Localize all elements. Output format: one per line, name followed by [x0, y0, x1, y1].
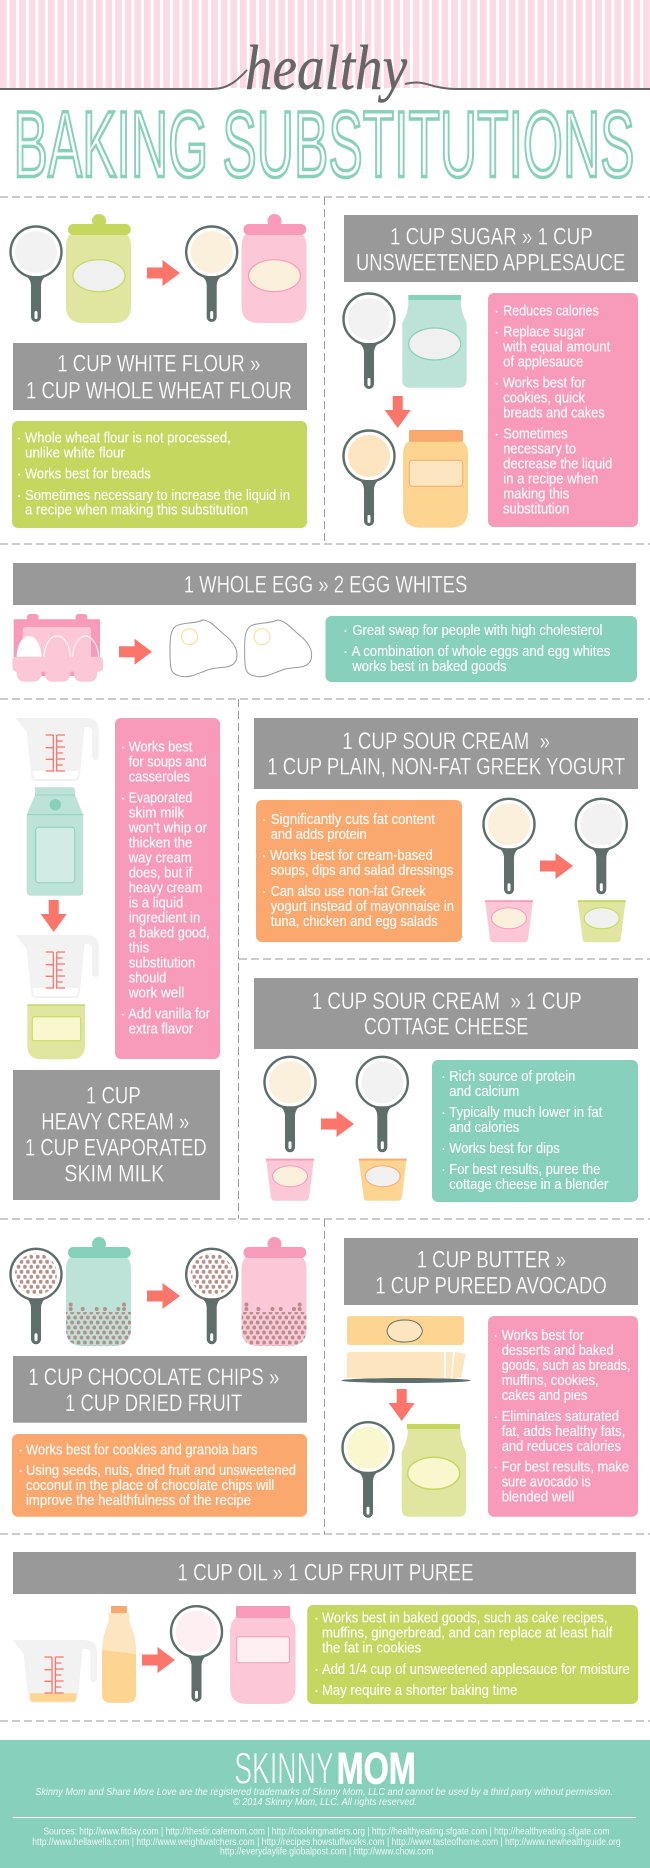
heading: [344, 215, 638, 282]
header: pink stripes: [0, 0, 650, 88]
text box: sugar notes: cookies, quick: [503, 391, 586, 407]
text box: cream notes: for soups and: [129, 755, 207, 771]
text box: egg notes: works best in baked goods: [352, 659, 507, 675]
icon: pink tub: [266, 1159, 314, 1201]
text box: avocado notes: [488, 1316, 638, 1517]
text box: flour notes: ·: [17, 431, 21, 447]
heading: 1 CUP WHITE FLOUR »: [57, 351, 260, 378]
icon: small green jar: [27, 1004, 85, 1059]
text box: cottage cheese notes: Typically much lower in fat: [449, 1105, 602, 1121]
panel: sugar to applesauce: [344, 215, 638, 528]
text box: cream notes: extra flavor: [129, 1021, 193, 1037]
text box: chocolate chip notes: ·: [18, 1442, 23, 1458]
text box: flour notes: [12, 421, 307, 528]
text box: cream notes: work well: [128, 986, 184, 1002]
heading: [13, 563, 636, 605]
text box: avocado notes: cakes and pies: [502, 1388, 587, 1404]
text box: oil notes: muffins, gingerbread, and can replace at least half: [322, 1626, 613, 1642]
text box: cream notes: substitution: [129, 956, 195, 972]
text box: yogurt notes: ·: [262, 884, 266, 900]
text box: yogurt notes: ·: [262, 812, 266, 828]
trademark notice: Skinny Mom and Share More Love are the registered trademarks of Skinny Mom, LLC and cannot be used by a third party without permission.: [35, 1787, 613, 1798]
heading: [13, 1356, 307, 1423]
icon: spoon of sour cream: [264, 1057, 316, 1152]
text box: cottage cheese notes: [432, 1060, 638, 1202]
text box: cream notes: thicken the: [129, 836, 192, 852]
text box: cream notes: ·: [121, 1006, 125, 1022]
arrow: [385, 396, 411, 428]
text box: yogurt notes: Significantly cuts fat content: [271, 812, 435, 828]
text box: flour notes: Whole wheat flour is not processed,: [25, 431, 231, 447]
text box: oil notes: the fat in cookies: [322, 1641, 421, 1657]
text box: cream notes: Works best: [129, 740, 192, 756]
text box: cream notes: casseroles: [129, 770, 190, 786]
arrow: [389, 1389, 415, 1421]
text box: oil notes: [307, 1605, 638, 1704]
text box: chocolate chip notes: Works best for cookies and granola bars: [26, 1442, 257, 1458]
icon: second egg white: [245, 620, 312, 677]
text box: sugar notes: ·: [494, 427, 499, 443]
panel: white flour to whole wheat flour: [10, 214, 307, 528]
arrow: [540, 853, 573, 879]
icon: teal jar with chips: [66, 1237, 131, 1346]
heading: 1 CUP BUTTER »: [417, 1247, 566, 1274]
heading: 1 CUP SOUR CREAM »: [342, 728, 550, 755]
text box: yogurt notes: yogurt instead of mayonnaise in: [271, 899, 454, 915]
heading: 1 WHOLE EGG » 2 EGG WHITES: [184, 572, 467, 599]
arrow: [142, 1647, 175, 1673]
text box: yogurt notes: [256, 800, 462, 942]
text box: sugar notes: Reduces calories: [503, 304, 599, 320]
icon: spoon of white flour: [10, 226, 62, 322]
text box: oil notes: Works best in baked goods, such as cake recipes,: [322, 1611, 607, 1627]
panel: heavy cream to evaporated skim milk: [13, 718, 220, 1200]
text box: chocolate chip notes: Using seeds, nuts, dried fruit and unsweetened: [26, 1463, 296, 1479]
heading: [13, 1070, 220, 1200]
icon: measuring cup with evaporated milk: [16, 935, 99, 998]
text box: avocado notes: blended well: [502, 1490, 574, 1506]
text box: sugar notes: Sometimes: [503, 427, 568, 443]
heading: [13, 343, 307, 410]
text box: sugar notes: decrease the liquid: [503, 457, 612, 473]
text box: avocado notes: Works best for: [502, 1328, 584, 1344]
text box: sugar notes: of applesauce: [503, 355, 583, 371]
footer background: [0, 1740, 650, 1868]
panel: chocolate chips to dried fruit: [10, 1237, 307, 1517]
text box: egg notes: ·: [343, 644, 348, 660]
icon: spoon of fruit puree: [171, 1606, 222, 1702]
heading: 1 CUP WHOLE WHEAT FLOUR: [26, 377, 292, 404]
text box: flour notes: ·: [17, 466, 21, 482]
icon: spoon of avocado: [342, 1422, 394, 1518]
icon: egg carton: [12, 614, 103, 682]
heading: [13, 1552, 636, 1594]
text box: avocado notes: ·: [493, 1409, 498, 1425]
text box: sugar notes: substitution: [503, 502, 569, 518]
panel: oil to fruit puree: [12, 1552, 638, 1704]
heading: [254, 718, 638, 789]
text box: cottage cheese notes: cottage cheese in a blender: [449, 1177, 608, 1193]
icon: measuring cup with oil: [12, 1640, 97, 1703]
heading: 1 CUP CHOCOLATE CHIPS »: [28, 1364, 279, 1391]
text box: oil notes: ·: [314, 1662, 319, 1678]
icon: green bottle: [402, 1424, 466, 1517]
text box: sugar notes: ·: [494, 304, 499, 320]
text box: cottage cheese notes: For best results, puree the: [449, 1162, 600, 1178]
text box: flour notes: Sometimes necessary to increase the liquid in: [25, 488, 290, 504]
icon: spoon of wheat flour: [186, 226, 237, 322]
text box: yogurt notes: Works best for cream-based: [270, 848, 433, 864]
icon: spoon of chocolate chips: [10, 1249, 62, 1344]
text box: sugar notes: making this: [503, 487, 569, 503]
icon: spoon of applesauce: [344, 430, 394, 526]
text box: avocado notes: Eliminates saturated: [502, 1409, 619, 1425]
text box: egg notes: Great swap for people with high cholesterol: [352, 623, 602, 639]
text box: avocado notes: desserts and baked: [502, 1343, 614, 1359]
text box: oil notes: May require a shorter baking time: [322, 1683, 517, 1699]
text box: yogurt notes: Can also use non-fat Greek: [271, 884, 426, 900]
heading: [344, 1238, 638, 1305]
text box: chocolate chip notes: [12, 1434, 307, 1517]
arrow: [321, 1111, 354, 1137]
text box: avocado notes: and reduces calories: [502, 1439, 621, 1455]
text box: sugar notes: with equal amount: [502, 340, 610, 356]
icon: milk carton: [27, 787, 83, 896]
heading: 1 CUP SUGAR » 1 CUP: [390, 223, 593, 250]
text box: cream notes: does, but if: [129, 866, 193, 882]
arrow: [41, 900, 67, 932]
heading: 1 CUP DRIED FRUIT: [65, 1390, 243, 1417]
text box: flour notes: unlike white flour: [25, 446, 125, 462]
heading: 1 CUP OIL » 1 CUP FRUIT PUREE: [177, 1560, 474, 1587]
heading: 1 CUP: [86, 1082, 141, 1109]
icon: oil bottle: [102, 1606, 136, 1703]
text box: cream notes: Evaporated: [129, 791, 192, 807]
text box: yogurt notes: ·: [262, 848, 266, 864]
text box: cream notes: ·: [121, 740, 125, 756]
text box: yogurt notes: tuna, chicken and egg salads: [271, 914, 438, 930]
text box: avocado notes: goods, such as breads,: [502, 1358, 630, 1374]
heading: HEAVY CREAM »: [41, 1108, 189, 1135]
text box: flour notes: ·: [17, 488, 21, 504]
text box: cottage cheese notes: ·: [441, 1105, 446, 1121]
text box: cream notes: ingredient in: [129, 911, 200, 927]
arrow: [119, 639, 152, 665]
icon: first egg white: [170, 620, 237, 677]
text box: egg notes: [326, 616, 637, 682]
footer: [0, 1740, 650, 1868]
text box: sugar notes: Works best for: [503, 376, 586, 392]
text box: cream notes: should: [129, 971, 166, 987]
text box: avocado notes: sure avocado is: [502, 1475, 591, 1491]
text box: yogurt notes: and adds protein: [271, 827, 367, 843]
text box: cottage cheese notes: and calories: [449, 1120, 519, 1136]
text box: oil notes: ·: [314, 1683, 319, 1699]
text box: cottage cheese notes: Works best for dips: [449, 1141, 560, 1157]
text box: sugar notes: breads and cakes: [503, 406, 605, 422]
logo: skinny mom: SKINNY: [234, 1744, 334, 1793]
panel: sour cream to greek yogurt: [254, 718, 638, 942]
text box: egg notes: A combination of whole eggs and egg whites: [352, 644, 610, 660]
text box: egg notes: ·: [343, 623, 348, 639]
header rule with swash: [0, 70, 650, 89]
title: healthy: healthy: [245, 32, 408, 103]
panel: sour cream to cottage cheese: [254, 978, 638, 1202]
text box: cream notes: a baked good,: [129, 926, 210, 942]
text box: avocado notes: ·: [493, 1328, 498, 1344]
text box: cottage cheese notes: Rich source of protein: [449, 1069, 575, 1085]
icon: measuring cup with cream: [16, 718, 99, 781]
sources: [32, 1827, 621, 1857]
text box: avocado notes: For best results, make: [502, 1460, 629, 1476]
text box: oil notes: ·: [314, 1611, 319, 1627]
icon: spoon of dried fruit: [186, 1249, 237, 1344]
arrow: [147, 1283, 180, 1309]
panel: butter to pureed avocado: [341, 1238, 638, 1518]
text box: cottage cheese notes: ·: [441, 1069, 446, 1085]
icon: pink jar: [242, 214, 306, 323]
text box: cream notes: heavy cream: [129, 881, 202, 897]
icon: spoon of sugar: [344, 294, 394, 389]
heading: SKIM MILK: [64, 1160, 164, 1187]
text box: cottage cheese notes: ·: [441, 1162, 446, 1178]
text box: cream notes: way cream: [128, 851, 192, 867]
text box: chocolate chip notes: improve the healthfulness of the recipe: [26, 1493, 251, 1509]
icon: pink puree jar: [230, 1606, 296, 1704]
text box: cream notes: won't whip or: [128, 821, 207, 837]
text box: flour notes: a recipe when making this substitution: [25, 503, 248, 519]
text box: sugar notes: [488, 293, 638, 527]
text box: cream notes: is a liquid: [129, 896, 183, 912]
text box: cottage cheese notes: and calcium: [449, 1084, 519, 1100]
text box: cottage cheese notes: ·: [441, 1141, 446, 1157]
icon: pink tub: [485, 900, 533, 942]
trademark notice: © 2014 Skinny Mom, LLC. All rights reserved.: [233, 1797, 417, 1808]
icon: green jar: [66, 214, 131, 323]
text box: cream notes: Add vanilla for: [128, 1006, 210, 1022]
text box: avocado notes: muffins, cookies,: [502, 1373, 599, 1389]
icon: spoon of cottage cheese: [357, 1057, 408, 1152]
text box: chocolate chip notes: ·: [18, 1463, 23, 1479]
text box: avocado notes: ·: [493, 1460, 498, 1476]
text box: cream notes: [115, 718, 220, 1059]
text box: sugar notes: in a recipe when: [503, 472, 598, 488]
heading: 1 CUP EVAPORATED: [25, 1134, 207, 1161]
icon: green tub: [578, 900, 626, 942]
icon: teal bottle: [402, 295, 467, 388]
icon: orange tub: [359, 1159, 407, 1201]
text box: sugar notes: necessary to: [503, 442, 576, 458]
text box: chocolate chip notes: coconut in the place of chocolate chips will: [26, 1478, 274, 1494]
text box: avocado notes: fat, adds healthy fats,: [502, 1424, 625, 1440]
sources: http://everydaylife.globalpost.com | http://www.chow.com: [220, 1846, 433, 1857]
heading: [254, 978, 638, 1049]
icon: butter on a dish: [341, 1316, 471, 1383]
text box: sugar notes: ·: [494, 376, 499, 392]
heading: 1 CUP SOUR CREAM » 1 CUP: [312, 988, 582, 1015]
text box: yogurt notes: soups, dips and salad dressings: [271, 863, 453, 879]
text box: cream notes: ·: [121, 791, 125, 807]
icon: orange jar: [403, 430, 468, 528]
panel: whole egg to egg whites: [12, 563, 637, 682]
icon: pink jar with fruit: [242, 1237, 306, 1346]
text box: sugar notes: ·: [494, 325, 499, 341]
icon: spoon of yogurt: [576, 799, 627, 894]
arrow: [147, 260, 180, 286]
text box: flour notes: Works best for breads: [25, 466, 151, 482]
logo: skinny mom: MOM: [337, 1744, 416, 1793]
icon: spoon of sour cream: [484, 799, 534, 894]
text box: sugar notes: Replace sugar: [503, 325, 585, 341]
heading: COTTAGE CHEESE: [364, 1014, 528, 1041]
text box: cream notes: this: [129, 941, 149, 957]
trademark notice: [35, 1787, 613, 1808]
text box: cream notes: skim milk: [129, 806, 185, 822]
